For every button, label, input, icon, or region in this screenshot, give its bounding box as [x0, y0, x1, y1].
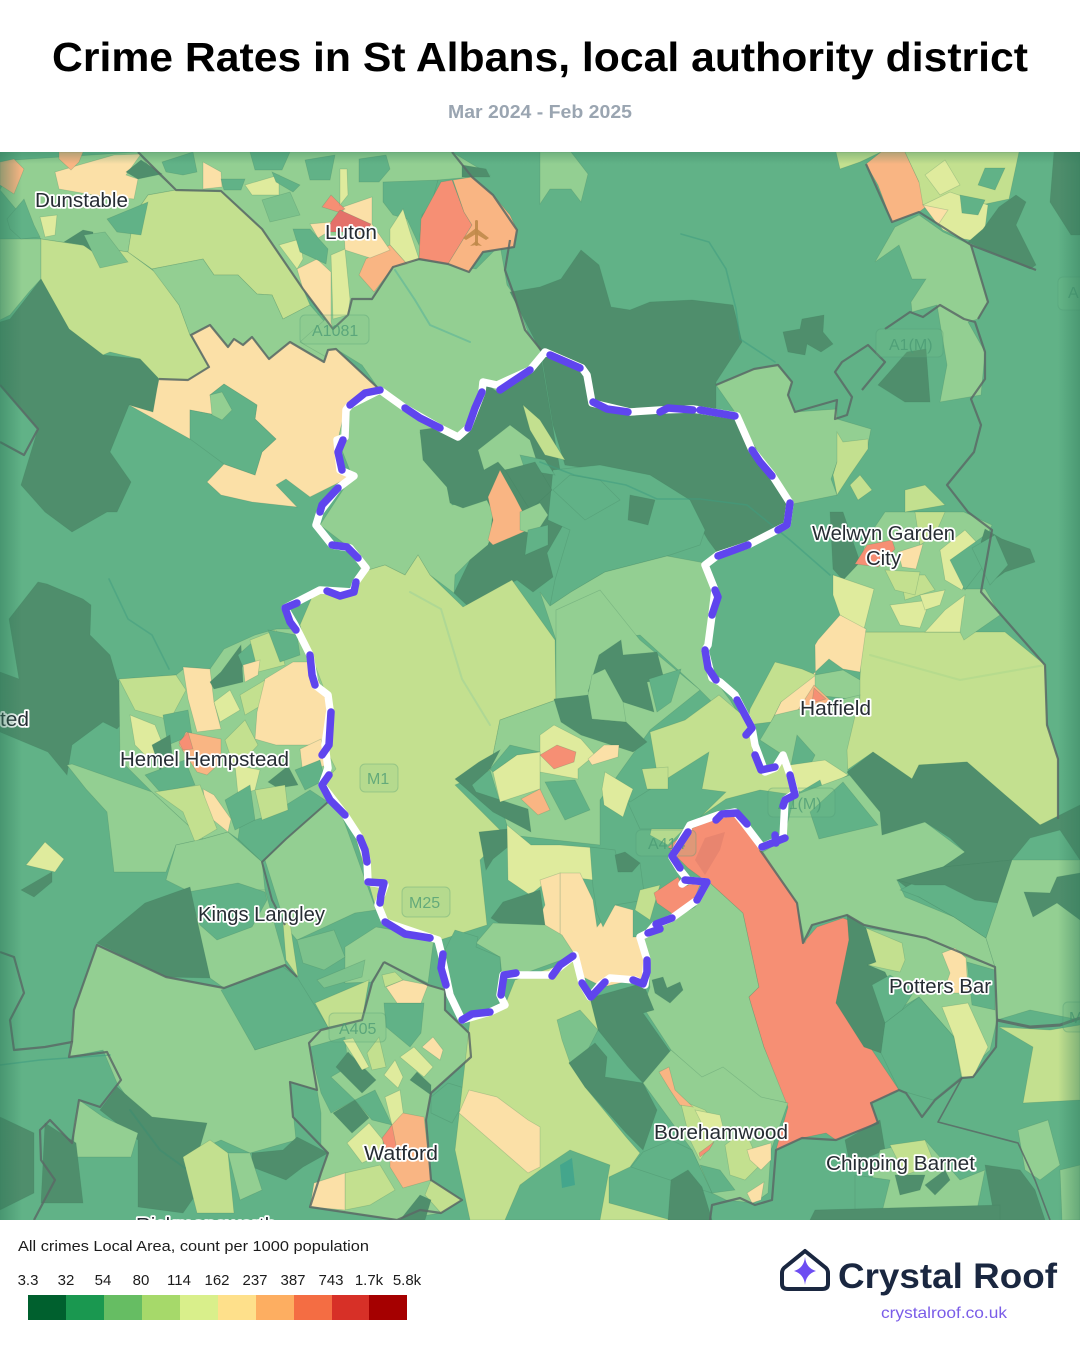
road label: A405 — [329, 1013, 386, 1042]
road label: A1(M) south: A1(M) — [778, 796, 822, 813]
road label: A1(M) south — [768, 788, 835, 817]
road label: right edge A: A — [1068, 285, 1079, 302]
road label: A1(M) — [876, 329, 943, 357]
legend title: All crimes Local Area, count per 1000 population — [18, 1238, 369, 1255]
label: Rickmansworth: Rickmansworth — [136, 1215, 276, 1237]
road label: M25 — [402, 887, 450, 917]
legend values: 237 — [242, 1272, 268, 1289]
legend values: 3.3 — [18, 1272, 38, 1289]
district borders — [0, 152, 1080, 1220]
label: Luton: Luton — [325, 222, 377, 244]
road label: A414: A414 — [648, 836, 685, 853]
legend values: 162 — [204, 1272, 230, 1289]
road label: M25: M25 — [409, 895, 440, 912]
label: Welwyn Garden: Welwyn Garden — [812, 523, 955, 545]
label: Kings Langley: Kings Langley — [198, 904, 325, 926]
legend values: 54 — [95, 1272, 111, 1289]
road label: M1: M1 — [367, 771, 389, 788]
legend values: 114 — [167, 1272, 191, 1289]
road label: M1 — [360, 764, 398, 792]
legend — [18, 1238, 422, 1320]
icon: airport plane — [463, 220, 489, 246]
logo wordmark: Crystal Roof — [838, 1257, 1057, 1296]
label: City: City — [866, 548, 901, 570]
label: Hemel Hempstead: Hemel Hempstead — [120, 749, 289, 771]
road label: A1081 — [300, 315, 369, 344]
label: Hatfield: Hatfield — [800, 698, 871, 720]
boundary of St Albans district — [285, 352, 795, 1020]
boundary white base line — [285, 352, 795, 1020]
legend colour scale — [28, 1295, 407, 1320]
title: Crime Rates in St Albans, local authority district — [52, 34, 1028, 80]
legend values: 5.8k — [393, 1272, 422, 1289]
road label: right edge A — [1058, 278, 1078, 308]
label: Watford: Watford — [364, 1143, 438, 1165]
legend values: 1.7k — [355, 1272, 384, 1289]
icon: house with star — [782, 1251, 828, 1289]
legend values: 743 — [318, 1272, 344, 1289]
map areas — [0, 152, 1080, 1220]
road label: A414 — [636, 830, 696, 856]
road label: A405: A405 — [339, 1021, 376, 1038]
logo url: crystalroof.co.uk — [881, 1305, 1008, 1322]
legend values: 32 — [58, 1272, 74, 1289]
legend values — [18, 1272, 422, 1289]
legend values: 80 — [133, 1272, 149, 1289]
map labels — [0, 190, 991, 1237]
road label: A1(M): A1(M) — [889, 337, 933, 354]
label: cut-off ted: ted — [0, 709, 29, 731]
rivers — [0, 234, 1045, 1168]
label: Borehamwood: Borehamwood — [654, 1122, 788, 1144]
logo: Crystal Roof — [782, 1251, 1057, 1322]
road label: right edge M — [1063, 1002, 1080, 1032]
subtitle: date range: Mar 2024 - Feb 2025 — [448, 102, 632, 122]
label: Dunstable: Dunstable — [35, 190, 128, 212]
boundary purple dashes — [285, 355, 795, 1020]
label: Chipping Barnet: Chipping Barnet — [826, 1153, 975, 1175]
legend values: 387 — [280, 1272, 306, 1289]
road label: A1081: A1081 — [312, 323, 358, 340]
label: Potters Bar: Potters Bar — [889, 976, 991, 998]
